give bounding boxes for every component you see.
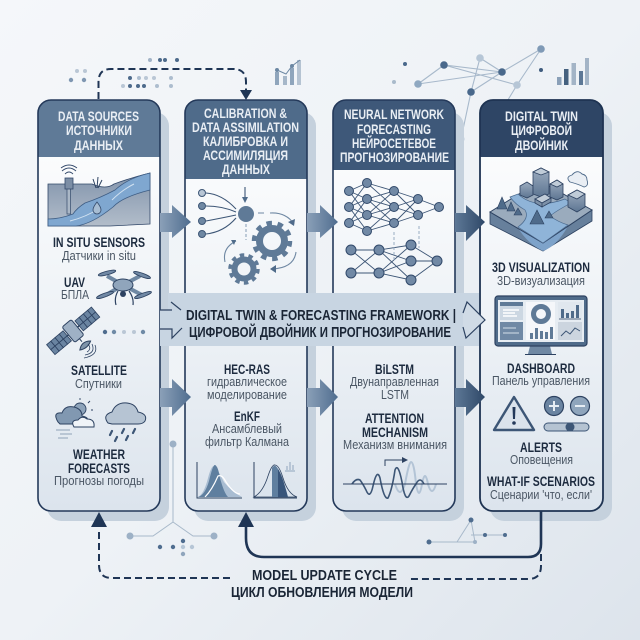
label: weather forecasts: WEATHER xyxy=(73,447,125,462)
arrow: neural to twin bottom xyxy=(455,379,485,416)
heading: data sources: ИСТОЧНИКИ xyxy=(66,122,132,138)
label: 3D visualization: 3D-визуализация xyxy=(497,274,585,288)
bottom title: model update cycle xyxy=(231,568,413,601)
dots near satellite xyxy=(103,330,145,334)
panel shadows xyxy=(47,112,612,521)
decorative node branch bottom right xyxy=(426,518,507,544)
heading: data sources: DATA SOURCES xyxy=(58,108,139,124)
decorative dots top left xyxy=(69,58,179,88)
label: in situ sensors: Датчики in situ xyxy=(62,249,136,263)
label: what-if scenarios: WHAT-IF SCENARIOS xyxy=(487,474,595,489)
heading: digital twin: DIGITAL TWIN xyxy=(505,108,578,124)
icon: assimilation flow and gears xyxy=(198,187,296,283)
heading: calibration: CALIBRATION & xyxy=(204,105,287,121)
label: attention mechanism: MECHANISM xyxy=(362,425,428,440)
heading: calibration: КАЛИБРОВКА И xyxy=(203,133,288,149)
label: satellite: Спутники xyxy=(75,377,122,391)
heading: data sources: ДАННЫХ xyxy=(74,137,124,153)
label: what-if scenarios xyxy=(487,474,595,502)
arrow: sources to calibration bottom xyxy=(160,379,191,416)
bottom title: model update cycle: MODEL UPDATE CYCLE xyxy=(252,568,397,584)
arrow: dashed update left xyxy=(91,512,230,578)
heading: neural network: FORECASTING xyxy=(357,121,431,137)
label: BiLSTM: LSTM xyxy=(381,388,409,402)
chart: attention waveform xyxy=(343,457,447,498)
label: what-if scenarios: Сценарии 'что, если' xyxy=(490,488,592,502)
panel: calibration xyxy=(185,100,307,511)
icon: scenario controls xyxy=(544,396,590,432)
panel: data sources xyxy=(38,100,160,511)
heading: neural network xyxy=(340,106,449,165)
label: alerts: Оповещения xyxy=(510,453,573,467)
arrow: calibration to neural bottom xyxy=(307,379,338,416)
label: dashboard: DASHBOARD xyxy=(507,361,575,376)
heading: data sources xyxy=(58,108,139,153)
arrow: neural to twin top xyxy=(455,205,485,241)
label: EnKF: EnKF xyxy=(234,409,260,424)
label: HEC-RAS: моделирование xyxy=(207,388,287,402)
chart: neural network diagram xyxy=(344,178,444,285)
icon: alert triangle xyxy=(494,397,534,430)
label: attention mechanism: Механизм внимания xyxy=(343,438,447,452)
heading: calibration: DATA ASSIMILATION xyxy=(192,119,299,135)
label: BiLSTM: Двунаправленная xyxy=(350,375,439,389)
arrow: dashed top loop xyxy=(98,69,252,100)
label: alerts xyxy=(510,440,573,467)
arrow: calibration to neural top xyxy=(307,205,338,238)
label: attention mechanism: ATTENTION xyxy=(365,411,424,426)
framework band arrow xyxy=(160,293,479,346)
band title xyxy=(186,308,456,341)
panel: neural network xyxy=(333,100,455,511)
arrow: framework band head xyxy=(463,302,485,338)
heading: neural network: НЕЙРОСЕТЕВОЕ xyxy=(352,134,436,151)
label: dashboard xyxy=(492,361,590,388)
label: dashboard: Панель управления xyxy=(492,374,590,388)
label: BiLSTM xyxy=(350,362,439,402)
label: HEC-RAS xyxy=(207,362,287,402)
icon: river with sensor xyxy=(48,165,150,226)
icon: small bar chart top centre xyxy=(275,60,301,85)
label: weather forecasts: FORECASTS xyxy=(68,461,130,476)
chart: distribution curves xyxy=(197,462,297,498)
heading: digital twin: ЦИФРОВОЙ xyxy=(511,121,572,138)
band title: ЦИФРОВОЙ ДВОЙНИК И ПРОГНОЗИРОВАНИЕ xyxy=(189,323,451,341)
label: BiLSTM: BiLSTM xyxy=(375,362,414,377)
band title: DIGITAL TWIN & FORECASTING FRAMEWORK | xyxy=(186,308,456,324)
icon: weather xyxy=(56,398,146,441)
heading: calibration xyxy=(192,105,299,177)
label: satellite: SATELLITE xyxy=(71,363,127,378)
label: weather forecasts xyxy=(54,447,144,488)
label: 3D visualization: 3D VISUALIZATION xyxy=(492,260,590,275)
heading: calibration: ДАННЫХ xyxy=(222,161,270,177)
arrow: solid feedback line xyxy=(238,511,541,557)
heading: neural network: NEURAL NETWORK xyxy=(344,106,444,122)
label: 3D visualization xyxy=(492,260,590,288)
heading: digital twin xyxy=(505,108,578,153)
icon: bar chart top right xyxy=(557,58,589,85)
label: in situ sensors xyxy=(53,235,145,263)
heading: digital twin: ДВОЙНИК xyxy=(515,136,568,153)
panel: digital twin xyxy=(480,100,603,511)
arcs from satellite xyxy=(84,344,96,358)
heading: calibration: АССИМИЛЯЦИЯ xyxy=(203,147,288,163)
label: weather forecasts: Прогнозы погоды xyxy=(54,474,144,488)
label: EnKF: Ансамблевый xyxy=(212,422,282,436)
label: in situ sensors: IN SITU SENSORS xyxy=(53,235,145,250)
arrow: dashed update right xyxy=(410,554,541,579)
label: HEC-RAS: HEC-RAS xyxy=(224,362,270,377)
arrow: sources to calibration top xyxy=(160,205,191,238)
label: HEC-RAS: гидравлическое xyxy=(207,375,287,389)
icon: dashboard monitor xyxy=(495,296,587,354)
label: UAV xyxy=(61,275,90,302)
icon: satellite xyxy=(44,304,109,366)
label: UAV: UAV xyxy=(64,275,85,290)
icon: drone xyxy=(96,269,152,305)
label: UAV: БПЛА xyxy=(61,288,90,302)
heading: neural network: ПРОГНОЗИРОВАНИЕ xyxy=(340,149,449,165)
label: attention mechanism xyxy=(343,411,447,452)
icon: 3D city and river block xyxy=(490,168,592,251)
label: satellite xyxy=(71,363,127,391)
decorative node branch bottom left xyxy=(126,440,218,556)
network graph top right xyxy=(392,45,545,143)
label: EnKF: фильтр Калмана xyxy=(205,435,289,449)
label: EnKF xyxy=(205,409,289,449)
label: alerts: ALERTS xyxy=(520,440,562,455)
bottom title: model update cycle: ЦИКЛ ОБНОВЛЕНИЯ МОДЕЛИ xyxy=(231,585,413,601)
